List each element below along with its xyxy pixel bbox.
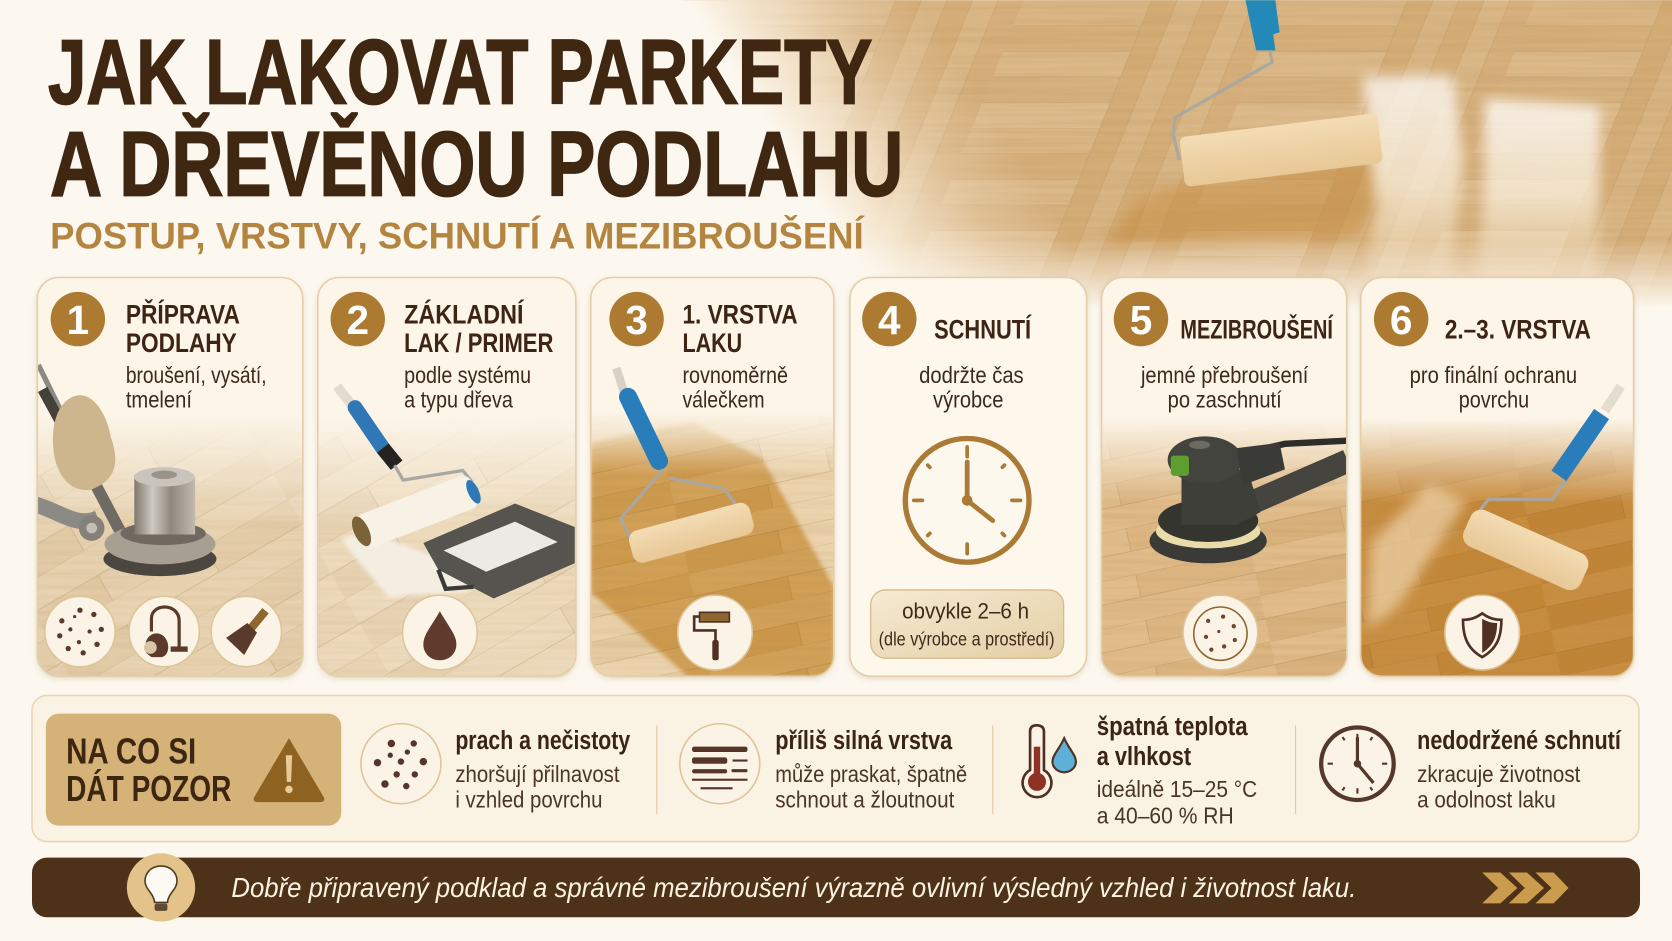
- number badge 3: [609, 292, 664, 346]
- panel: step 5: [1102, 277, 1348, 676]
- warning item: thick layer: schnout a žloutnout: [775, 786, 955, 812]
- icon: floor sanding machine: [32, 365, 216, 576]
- description: [1140, 362, 1309, 413]
- heading: SCHNUTÍ: [934, 314, 1032, 344]
- panel: step 6: [1361, 277, 1634, 676]
- hero photo: roller on herringbone floor: [661, 0, 1672, 309]
- description: [919, 362, 1024, 413]
- warning item: temperature and humidity: ideálně 15–25 °C: [1097, 776, 1257, 802]
- number badge 5: 5: [1130, 297, 1152, 343]
- description: a typu dřeva: [404, 387, 513, 413]
- number badge 2: 2: [346, 297, 369, 343]
- icon: hero roller: [1173, 0, 1383, 187]
- icon: warning triangle: [254, 738, 324, 802]
- heading: PŘÍPRAVA: [126, 299, 240, 329]
- icon: clock: [1321, 727, 1394, 800]
- icon: white roller: [337, 386, 484, 550]
- icon: roller: [1459, 386, 1621, 594]
- warning item: thick layer: [680, 724, 967, 812]
- heading: [404, 299, 553, 358]
- number badge 3: 3: [625, 297, 648, 343]
- description: [404, 362, 531, 413]
- icon: sanding disc: [1183, 595, 1258, 670]
- description: jemné přebroušení: [1140, 362, 1309, 388]
- icon: chevrons: [1482, 873, 1569, 903]
- panel: step 3: [591, 277, 834, 676]
- warning item: drying time: zkracuje životnost: [1417, 761, 1581, 787]
- heading: [682, 299, 798, 358]
- warning item: temperature and humidity: špatná teplota: [1097, 713, 1248, 741]
- callout: drying time: (dle výrobce a prostředí): [879, 629, 1055, 650]
- description: tmelení: [126, 387, 192, 413]
- description: povrchu: [1459, 387, 1529, 413]
- icon: putty knife: [211, 596, 282, 667]
- icon: primer drop: [403, 595, 477, 670]
- number badge 1: [51, 292, 105, 346]
- heading: PODLAHY: [126, 328, 237, 358]
- warning item: thick layer: příliš silná vrstva: [775, 727, 953, 755]
- warning item: temperature and humidity: [1023, 713, 1257, 828]
- warning item: dust: i vzhled povrchu: [455, 786, 602, 812]
- warning item: temperature and humidity: a vlhkost: [1097, 743, 1191, 771]
- description: broušení, vysátí,: [126, 362, 267, 388]
- icon: sanding dust: [45, 596, 115, 667]
- number badge 4: 4: [878, 297, 901, 343]
- tip text: Dobře připravený podklad a správné mezibroušení výrazně ovlivní výsledný vzhled i životnost laku.: [231, 872, 1356, 903]
- warning item: drying time: a odolnost laku: [1417, 786, 1556, 812]
- warning label box: DÁT POZOR: [66, 768, 231, 809]
- heading: MEZIBROUŠENÍ: [1180, 314, 1333, 344]
- icon: roller badge: [678, 595, 752, 670]
- number badge 6: [1374, 292, 1428, 346]
- description: podle systému: [404, 362, 531, 388]
- icon: thermometer and drop: [1023, 725, 1076, 797]
- number badge 5: [1114, 292, 1168, 346]
- description: [1410, 362, 1577, 413]
- title: JAK LAKOVAT PARKETY: [48, 22, 872, 124]
- number badge 1: 1: [67, 297, 89, 343]
- subtitle: POSTUP, VRSTVY, SCHNUTÍ A MEZIBROUŠENÍ: [50, 215, 865, 257]
- description: po zaschnutí: [1168, 387, 1282, 413]
- icon: clock: [905, 439, 1029, 562]
- description: [682, 362, 788, 413]
- description: pro finální ochranu: [1410, 362, 1577, 388]
- number badge 6: 6: [1390, 297, 1412, 343]
- panel: step 4: [850, 277, 1087, 676]
- heading: ZÁKLADNÍ: [404, 299, 524, 329]
- panel: step 2: [318, 277, 576, 676]
- title: A DŘEVĚNOU PODLAHU: [50, 113, 903, 215]
- description: dodržte čas: [919, 362, 1024, 388]
- description: rovnoměrně: [682, 362, 788, 388]
- warning item: dust: prach a nečistoty: [455, 727, 631, 755]
- callout: drying time: obvykle 2–6 h: [902, 599, 1029, 624]
- callout: drying time: [871, 590, 1064, 658]
- number badge 4: [862, 292, 917, 346]
- icon: paint tray: [423, 504, 575, 598]
- icon: light bulb: [127, 853, 195, 922]
- icon: shield: [1445, 595, 1520, 670]
- warning item: drying time: nedodržené schnutí: [1417, 727, 1622, 755]
- warning label box: [46, 714, 341, 826]
- warning item: dust: [361, 724, 631, 812]
- warning item: thick layer: může praskat, špatně: [775, 761, 967, 787]
- heading: [126, 299, 240, 358]
- warning item: dust: zhoršují přilnavost: [455, 761, 620, 787]
- icon: orbital sander: [1150, 436, 1348, 563]
- icon: roller: [616, 368, 756, 565]
- tip bar: [32, 853, 1640, 922]
- heading: LAK / PRIMER: [404, 328, 553, 358]
- heading: LAKU: [682, 328, 742, 358]
- panel: step 1: [32, 277, 303, 676]
- title: [48, 22, 903, 215]
- description: [126, 362, 267, 413]
- icon: vacuum cleaner: [129, 596, 199, 667]
- warning label box: NA CO SI: [66, 731, 196, 772]
- description: výrobce: [933, 387, 1003, 413]
- heading: 2.–3. VRSTVA: [1445, 314, 1591, 344]
- warning item: temperature and humidity: a 40–60 % RH: [1097, 802, 1234, 828]
- number badge 2: [331, 292, 385, 346]
- panel: warnings: [32, 695, 1639, 842]
- warning item: drying time: [1321, 727, 1622, 812]
- heading: 1. VRSTVA: [682, 299, 798, 329]
- description: válečkem: [682, 387, 765, 413]
